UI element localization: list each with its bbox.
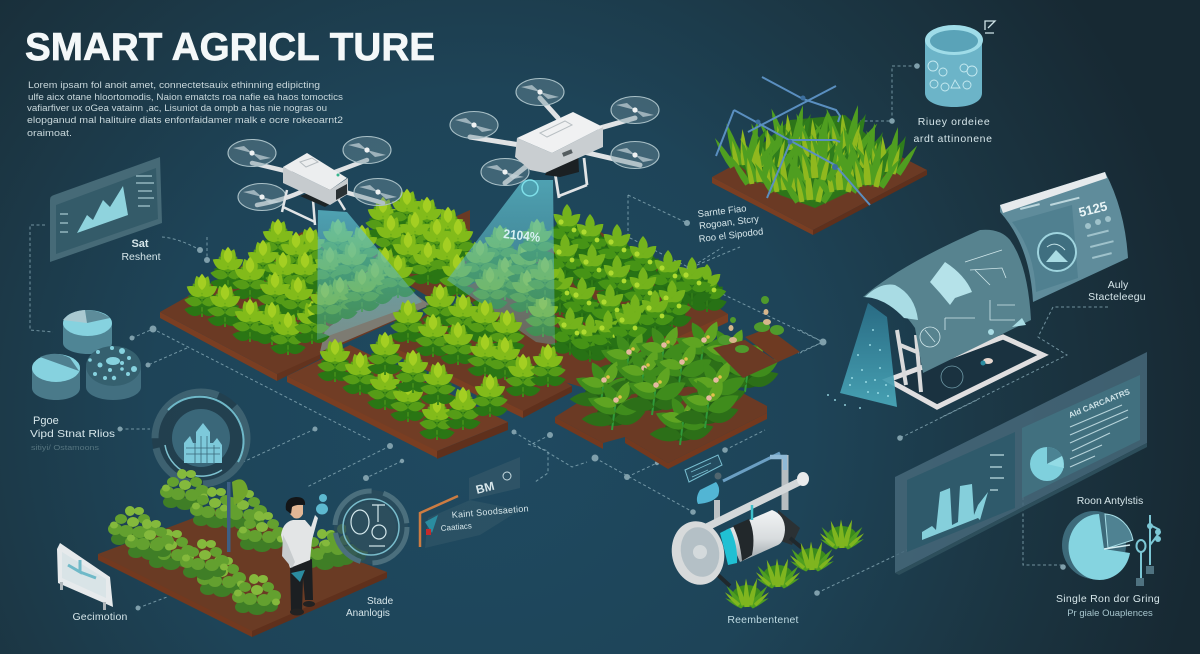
person with tablet	[281, 494, 328, 616]
icon: leak pipe	[420, 496, 520, 548]
label tag near pump	[685, 455, 722, 482]
label: sensors: Roo el Sipodod	[698, 226, 764, 245]
intro text block: Lorem ipsam fol anoit amet, connectetsauix ethinning edipicting	[28, 80, 320, 91]
drone: right	[450, 78, 659, 198]
icon: sensor branch	[1136, 515, 1161, 586]
icon: droplet hologram	[316, 494, 328, 514]
label: Vipd Stnat Rlios	[30, 415, 115, 452]
screen: pie and text	[1022, 375, 1140, 498]
label: Single Ron dor Gring: Single Ron dor Gring	[1056, 593, 1160, 605]
label: machine: Stacteleegu	[1088, 291, 1146, 303]
label: Kaint Soodsaetion: Kaint Soodsaetion	[451, 503, 529, 520]
bed: lower right with flowers	[555, 319, 782, 469]
cylinder: dots	[86, 346, 141, 400]
panel: dashboard sheet: 5125	[1077, 198, 1109, 220]
label: machine	[1088, 279, 1146, 303]
label: tank	[913, 116, 993, 145]
screen: pie and text: Ald CARCAATRS	[1067, 387, 1132, 420]
label: Roon Antylstis: Roon Antylstis	[1077, 495, 1143, 507]
cylinder: top	[63, 310, 112, 354]
intro text block: ulfe aicx otane hloortomodis, Naion ematcts roa nafie ea haos tomoctics	[28, 92, 343, 103]
drone scan beam: right	[447, 180, 555, 345]
label: Single Ron dor Gring: Pr giale Ouaplences	[1067, 608, 1153, 619]
label: sensors: Sarnte Fiao	[697, 203, 747, 220]
label: Kaint Soodsaetion	[440, 503, 529, 533]
bed: small seedlings	[713, 296, 800, 378]
drone scan beam: left	[317, 210, 422, 340]
label: sensors: Rogoan, Stcry	[699, 214, 760, 232]
panel: line chart screen	[50, 157, 162, 262]
screen: bars	[907, 432, 1015, 552]
icon: analysis ring	[334, 490, 408, 564]
label: sensors	[695, 202, 764, 245]
bed: lower left with bushes	[98, 469, 387, 637]
label: Vipd Stnat Rlios: Vipd Stnat Rlios	[30, 428, 115, 440]
label: Vipd Stnat Rlios: sitiyi/ Ostamoons	[31, 443, 99, 452]
chart: pie	[1062, 511, 1133, 580]
icon: database cylinders	[32, 310, 141, 400]
intro text block: vafiarfiver ux oGea vatainn ,ac, Lisuniot da ompb a has nie nogras ou	[27, 103, 327, 114]
label: Stade Ananlogis: Ananlogis	[346, 608, 390, 619]
label: tank: ardt attinonene	[913, 133, 993, 145]
icon: city sensor ring	[152, 389, 250, 487]
icon: soil sensor pole	[227, 479, 248, 552]
plants: left bed	[183, 219, 417, 356]
label: Gecimotion: Gecimotion	[72, 611, 128, 623]
plants: small grass tufts	[724, 519, 865, 609]
label: screen: Reshent	[121, 251, 161, 263]
hologram: BM note	[469, 457, 520, 500]
intro text block: elopganud mal halituire diats enfonfaidamer malk e ocre rokeoarnt2	[27, 115, 343, 126]
frame base	[888, 330, 1043, 407]
hologram sheet	[863, 230, 1031, 373]
legs	[290, 559, 315, 616]
title: SMART AGRICL TURE	[25, 26, 435, 69]
torso	[281, 515, 318, 568]
label: Vipd Stnat Rlios: Pgoe	[33, 415, 59, 427]
beam reading: 2104%	[503, 226, 541, 245]
bed: centre right	[385, 305, 572, 418]
panel: analytics dashboard	[895, 352, 1147, 575]
face	[290, 505, 303, 518]
plants: right large bed	[438, 204, 728, 363]
bed: back left	[160, 232, 430, 381]
water spray	[827, 303, 897, 409]
icon: water tank	[925, 21, 995, 107]
label: screen	[121, 238, 161, 263]
panel: dashboard sheet	[1000, 172, 1128, 302]
hair	[286, 497, 305, 514]
label: machine: Auly	[1108, 279, 1129, 291]
plants: centre right bed	[389, 284, 567, 398]
label: Kaint Soodsaetion: Caatiacs	[440, 521, 472, 533]
label: Stade Ananlogis: Stade	[367, 596, 394, 607]
label: Stade Ananlogis	[346, 596, 394, 619]
cylinder: left	[32, 354, 80, 400]
label: screen: Sat	[131, 238, 149, 250]
tablet	[291, 570, 305, 582]
bed: right large	[460, 225, 728, 390]
bed: grass with irrigation frame	[712, 77, 927, 235]
bushes	[108, 469, 369, 615]
intro text block	[27, 80, 343, 139]
label: Reembentenet: Reembentenet	[727, 614, 799, 626]
bed: front centre	[287, 345, 508, 459]
drone: left	[228, 136, 402, 225]
bed: back centre	[370, 210, 470, 303]
label: Single Ron dor Gring	[1056, 593, 1160, 619]
plants: back centre bed	[364, 189, 477, 286]
hologram: BM note: BM	[474, 479, 496, 497]
intro text block: oraimoat.	[27, 128, 72, 139]
icon: water pump	[666, 453, 809, 590]
panel: curved hologram machine	[827, 230, 1043, 409]
dashed connector lines	[30, 63, 1108, 610]
icon: soil monitor panel	[57, 543, 113, 610]
plants: front centre bed	[316, 332, 509, 441]
label: tank: Riuey ordeiee	[918, 116, 990, 128]
